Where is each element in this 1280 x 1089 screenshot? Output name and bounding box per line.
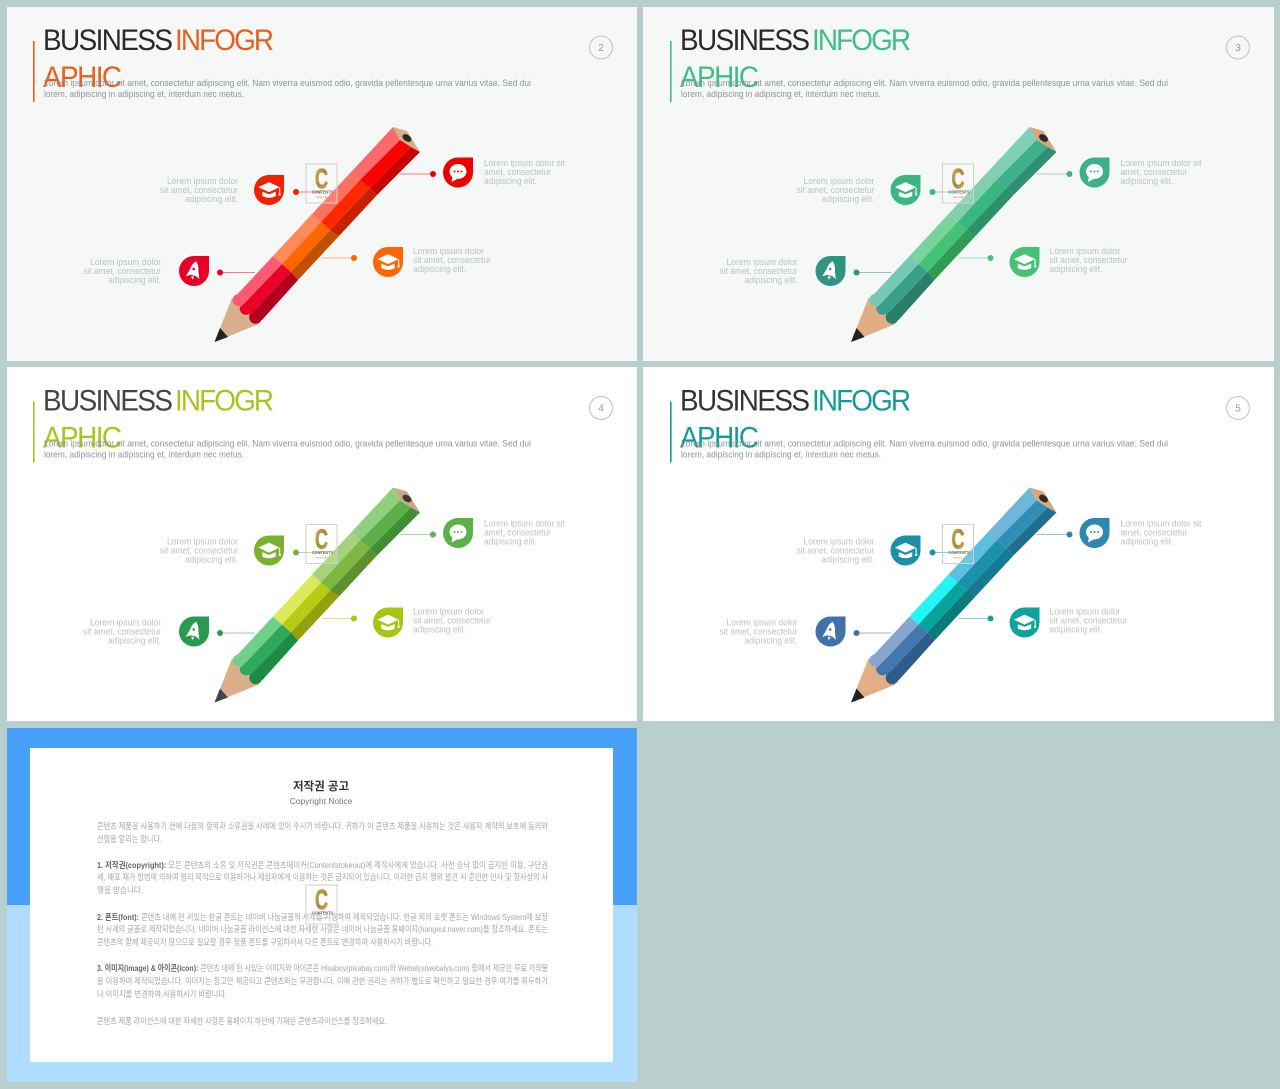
label lower left bbox=[720, 618, 798, 646]
page number bbox=[590, 396, 612, 420]
watermark logo: C bbox=[315, 524, 328, 554]
watermark logo bbox=[942, 524, 974, 564]
intro text: Lorem ipsum dolor sit amet, consectetur adipiscing elit. Nam viverra euismod odio, gravida pellentesque urna varius vitae. Sed dui bbox=[681, 78, 1168, 88]
text: section 3 image and icon: 을 이용하여 제작되었습니다. 이미지는 참고만 제공되고 콘텐츠와는 무관합니다. 이에 관한 권리는 귀하가 별도로 확인하고 필요한 경우 여기를 위두하거 bbox=[97, 976, 548, 986]
text: introduction bbox=[97, 821, 548, 844]
label upper left: adipiscing elit. bbox=[822, 194, 874, 204]
label lower right: sit amet, consectetur bbox=[1050, 616, 1128, 626]
watermark logo: CONTENTS bbox=[312, 910, 333, 916]
text: section 1 copyright: 1. 저작권(copyright): 모든 콘텐츠의 소유 및 저작권은 콘텐츠메이커(Contentstokeout)에 제작사에게 있습니다. 사전 승낙 없이 금지된 이용, 구단권 bbox=[97, 860, 548, 870]
pencil bbox=[851, 488, 1056, 702]
page number: 3 bbox=[1235, 43, 1241, 54]
label lower left: sit amet, consectetur bbox=[720, 626, 798, 636]
watermark logo bbox=[306, 524, 337, 564]
label upper left: Lorem ipsum dolor bbox=[167, 536, 238, 546]
label upper right: adipiscing elit. bbox=[484, 176, 537, 186]
watermark logo: stock bbox=[316, 556, 328, 560]
icon: graduation cap teal blue bbox=[890, 536, 920, 566]
title: business infographic: INFOGR bbox=[175, 24, 274, 57]
label lower right: sit amet, consectetur bbox=[413, 616, 491, 626]
heading: copyright notice bbox=[290, 779, 353, 806]
label lower right: Lorem ipsum dolor bbox=[413, 606, 484, 616]
icon: graduation cap light green bbox=[1010, 247, 1040, 277]
label upper left: sit amet, consectetur bbox=[796, 185, 874, 195]
title: business infographic: APHIC bbox=[680, 61, 759, 94]
label lower left: adipiscing elit. bbox=[744, 636, 798, 646]
label lower right: adipiscing elit. bbox=[1050, 624, 1102, 634]
label upper left: sit amet, consectetur bbox=[796, 546, 874, 556]
title: business infographic: INFOGR bbox=[812, 24, 911, 57]
label lower left: adipiscing elit. bbox=[108, 275, 161, 285]
intro text: lorem, adipiscing in adipiscing et, interdum nec metus. bbox=[681, 450, 881, 460]
icon: rocket green bbox=[179, 616, 209, 646]
label lower left: sit amet, consectetur bbox=[720, 266, 798, 276]
pencil bbox=[851, 127, 1056, 342]
label lower right: sit amet, consectetur bbox=[413, 255, 491, 265]
label upper right bbox=[484, 158, 565, 186]
label lower left: Lorem ipsum dolor bbox=[90, 257, 161, 267]
intro text: lorem, adipiscing in adipiscing et, interdum nec metus. bbox=[44, 89, 244, 99]
intro text: Lorem ipsum dolor sit amet, consectetur adipiscing elit. Nam viverra euismod odio, gravida pellentesque urna varius vitae. Sed dui bbox=[681, 438, 1168, 448]
text: section 3 image and icon: 3. 이미지(image) & 아이콘(icon): 콘텐츠 내에 된 사있는 이미지와 아이콘은 Hixaboy(pixabay.com)와 Webalys(webalys.com) 등에서 제공된 무료 저작물 bbox=[97, 963, 548, 973]
title: business infographic bbox=[670, 24, 911, 102]
text: section 2 font: 된 시세의 글꼴로 제작되었습니다. 네이버 나눔글꼴 라이선스에 대한 자세한 사항은 네이버 나눔글꼴 홈페이지(hangeul.naver.com)를 참조하세요. 폰트는 bbox=[97, 924, 548, 934]
intro text: Lorem ipsum dolor sit amet, consectetur adipiscing elit. Nam viverra euismod odio, gravida pellentesque urna varius vitae. Sed dui bbox=[44, 438, 531, 448]
intro text: lorem, adipiscing in adipiscing et, interdum nec metus. bbox=[44, 450, 244, 460]
panel: slide 4 lime pencil bbox=[7, 367, 637, 721]
label lower left: adipiscing elit. bbox=[744, 275, 798, 285]
watermark logo: CONTENTS bbox=[312, 190, 333, 194]
text: section 1 copyright: 행을 받습니다. bbox=[97, 885, 143, 895]
label lower left: Lorem ipsum dolor bbox=[726, 257, 798, 267]
label lower left: Lorem ipsum dolor bbox=[90, 618, 161, 628]
page number bbox=[590, 36, 612, 59]
label upper left bbox=[796, 176, 875, 204]
label lower right: Lorem ipsum dolor bbox=[1050, 606, 1121, 616]
label lower right: adipiscing elit. bbox=[413, 264, 466, 274]
text: section 1 copyright: 세, 배포 재가 방법에 의하여 영리 목적으로 이용하거나 제삼자에게 이용하는 것은 금지되어 있습니다. 이러한 금지 행위 발견 시 준민한 민사 및 형사상의 사 bbox=[97, 872, 548, 882]
label lower left: sit amet, consectetur bbox=[83, 626, 161, 636]
label upper right bbox=[1120, 518, 1202, 546]
label lower right bbox=[1050, 606, 1128, 634]
label upper left bbox=[796, 536, 875, 564]
label upper right: adipiscing elit. bbox=[1120, 176, 1174, 186]
label upper right: Lorem ipsum dolor sit bbox=[1120, 158, 1202, 168]
icon: graduation cap teal bbox=[1010, 608, 1040, 638]
label upper left: sit amet, consectetur bbox=[160, 185, 238, 195]
title: business infographic: BUSINESS bbox=[680, 385, 810, 418]
title: business infographic: BUSINESS bbox=[43, 385, 173, 418]
title: business infographic: BUSINESS bbox=[680, 24, 810, 57]
icon: chat bubble green bbox=[443, 518, 473, 548]
icon: chat bubble red bbox=[443, 158, 473, 188]
label lower right bbox=[1050, 246, 1128, 274]
label lower left bbox=[83, 618, 161, 646]
panel: copyright notice bbox=[7, 728, 637, 1082]
watermark logo: C bbox=[315, 884, 328, 915]
heading: copyright notice: 저작권 공고 bbox=[293, 779, 349, 793]
label lower right: adipiscing elit. bbox=[1050, 264, 1102, 274]
title: business infographic: INFOGR bbox=[175, 385, 274, 418]
pencil bbox=[214, 127, 420, 342]
watermark logo: C bbox=[952, 524, 964, 554]
title: business infographic: INFOGR bbox=[812, 385, 911, 418]
title: business infographic bbox=[33, 24, 274, 102]
label upper left: Lorem ipsum dolor bbox=[804, 536, 875, 546]
page number: 5 bbox=[1235, 404, 1241, 414]
intro text bbox=[681, 438, 1168, 460]
connector lines and dots bbox=[217, 532, 436, 636]
text: introduction: 콘텐츠 제품을 사용하기 전에 다음의 항목과 소유권을 사례에 있어 주시기 바랍니다. 귀하가 이 콘텐츠 제품을 사용하는 것은 사용자 계약의 보호에 동의와 bbox=[97, 821, 548, 831]
label lower right bbox=[413, 246, 491, 274]
panel: slide 2 red pencil bbox=[7, 7, 637, 361]
label upper right: adipiscing elit. bbox=[484, 536, 537, 546]
label upper right: adipiscing elit. bbox=[1120, 536, 1174, 546]
title: business infographic: APHIC bbox=[43, 61, 122, 94]
title: business infographic bbox=[33, 385, 274, 462]
text: section 2 font bbox=[97, 912, 548, 947]
connector lines and dots bbox=[217, 171, 436, 276]
label upper right: amet, consectetur bbox=[1120, 167, 1188, 177]
page number bbox=[1226, 36, 1250, 59]
icon: chat bubble green bbox=[1080, 158, 1110, 188]
icon: rocket blue bbox=[816, 616, 846, 646]
watermark logo: C bbox=[952, 163, 964, 194]
watermark logo bbox=[306, 163, 337, 203]
watermark logo: CONTENTS bbox=[948, 190, 970, 194]
intro text bbox=[44, 438, 531, 460]
label lower left: adipiscing elit. bbox=[108, 636, 161, 646]
watermark logo: C bbox=[315, 163, 328, 194]
label lower left bbox=[83, 257, 161, 285]
label upper right: amet, consectetur bbox=[1120, 528, 1188, 538]
label lower left: sit amet, consectetur bbox=[83, 266, 161, 276]
label upper left: adipiscing elit. bbox=[822, 554, 874, 564]
intro text: lorem, adipiscing in adipiscing et, interdum nec metus. bbox=[681, 89, 881, 99]
label lower right bbox=[413, 606, 491, 634]
intro text bbox=[681, 78, 1168, 99]
title: business infographic bbox=[670, 385, 911, 462]
icon: graduation cap olive bbox=[254, 536, 284, 566]
label upper right: Lorem ipsum dolor sit bbox=[1120, 518, 1202, 528]
watermark logo: stock bbox=[316, 195, 328, 199]
watermark logo bbox=[306, 884, 337, 924]
text: introduction: 선행을 알리는 합니다. bbox=[97, 834, 162, 844]
icon: chat bubble blue bbox=[1080, 518, 1110, 548]
label upper right: amet, consectetur bbox=[484, 167, 551, 177]
text: section 2 font: 콘텐츠의 함께 제공되지 않으므로 필요할 경우 정품 폰트를 구입하셔서 다른 폰트로 변경하여 사용하시기 바랍니다. bbox=[97, 937, 433, 947]
label upper left: Lorem ipsum dolor bbox=[167, 176, 238, 186]
text: section 2 font: 2. 폰트(font): 콘텐츠 내에 된 서있는 한글 폰트는 네이버 나눔글꼴의 서체를 사용하여 제작되었습니다. 한글 외의 로켓 폰트는 Windows System에 보장 bbox=[97, 912, 548, 922]
intro text: Lorem ipsum dolor sit amet, consectetur adipiscing elit. Nam viverra euismod odio, gravida pellentesque urna varius vitae. Sed dui bbox=[44, 78, 531, 88]
label upper right bbox=[1120, 158, 1202, 186]
connector lines and dots bbox=[854, 171, 1072, 276]
text: section 1 copyright bbox=[97, 860, 548, 895]
panel: slide 3 green pencil bbox=[643, 7, 1274, 361]
panel: slide 5 blue pencil bbox=[643, 367, 1274, 721]
label upper right: amet, consectetur bbox=[484, 528, 551, 538]
label upper left: adipiscing elit. bbox=[185, 554, 238, 564]
watermark logo bbox=[942, 163, 974, 203]
icon: rocket green bbox=[816, 256, 846, 286]
label upper right bbox=[484, 518, 565, 546]
watermark logo: CONTENTS bbox=[948, 550, 970, 555]
label upper left bbox=[160, 176, 238, 204]
title: business infographic: APHIC bbox=[680, 422, 759, 455]
label lower right: Lorem ipsum dolor bbox=[413, 246, 484, 256]
label lower left bbox=[720, 257, 798, 285]
connector lines and dots bbox=[854, 532, 1072, 636]
label lower right: Lorem ipsum dolor bbox=[1050, 246, 1121, 256]
label lower right: sit amet, consectetur bbox=[1050, 255, 1128, 265]
label upper right: Lorem ipsum dolor sit bbox=[484, 518, 565, 528]
icon: graduation cap orange bbox=[373, 247, 403, 277]
icon: graduation cap green bbox=[890, 175, 920, 205]
label upper left: adipiscing elit. bbox=[185, 194, 238, 204]
title: business infographic: BUSINESS bbox=[43, 24, 173, 57]
text: section 3 image and icon: 나 이미지를 변경하여 사용하시기 바랍니다. bbox=[97, 989, 227, 999]
label lower left: Lorem ipsum dolor bbox=[726, 618, 798, 628]
icon: graduation cap lime bbox=[373, 608, 403, 638]
watermark logo: stock bbox=[952, 556, 964, 560]
label upper left: Lorem ipsum dolor bbox=[804, 176, 875, 186]
label upper left: sit amet, consectetur bbox=[160, 546, 238, 556]
pencil bbox=[214, 488, 420, 702]
title: business infographic: APHIC bbox=[43, 422, 122, 455]
heading: copyright notice: Copyright Notice bbox=[290, 796, 353, 806]
icon: rocket red bbox=[179, 256, 209, 286]
label lower right: adipiscing elit. bbox=[413, 624, 466, 634]
intro text bbox=[44, 78, 531, 99]
label upper left bbox=[160, 536, 238, 564]
page number bbox=[1226, 396, 1250, 420]
watermark logo: CONTENTS bbox=[312, 550, 333, 555]
watermark logo: stock bbox=[952, 195, 964, 199]
text: section 3 image and icon bbox=[97, 963, 548, 999]
label upper right: Lorem ipsum dolor sit bbox=[484, 158, 565, 168]
page number: 2 bbox=[598, 43, 604, 54]
icon: graduation cap red bbox=[254, 175, 284, 205]
watermark logo: stock bbox=[316, 916, 328, 920]
page number: 4 bbox=[598, 404, 604, 414]
text: closing note: 콘텐츠 제품 라이선스에 대한 자세한 사항은 홈페이지 하단에 기재된 콘텐츠라이선스를 참조하세요. bbox=[97, 1016, 387, 1026]
